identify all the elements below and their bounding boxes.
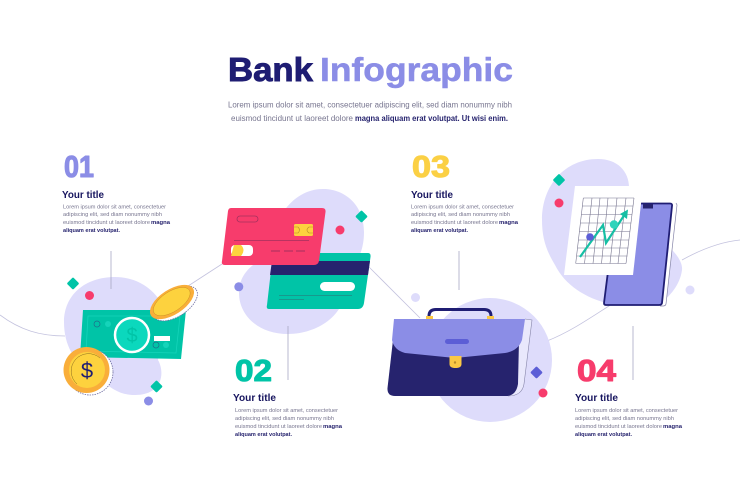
connecting line (0, 240, 740, 341)
panel: 03 text: Your title (411, 189, 453, 201)
icon: dollar coin: $ (81, 358, 93, 383)
flap (392, 319, 525, 358)
chart card (564, 186, 643, 275)
illustration: briefcase (387, 251, 552, 422)
illustration: credit cards (222, 189, 420, 380)
panel: 01 text: euismod tincidunt ut laoreet dolore (63, 220, 150, 226)
panel: 02 text: aliquam erat volutpat. (235, 432, 293, 438)
illustration: phone and chart (542, 159, 694, 380)
illustration: money (64, 251, 203, 406)
panel: 04 text: aliquam erat volutpat. (575, 432, 633, 438)
bag body (387, 340, 519, 396)
panel: 02 text: 02 (235, 353, 272, 388)
panel: 01 text: aliquam erat volutpat. (63, 228, 121, 234)
icon: tilted coin (144, 277, 203, 329)
red card (222, 208, 326, 265)
panel: 01 text (62, 149, 171, 234)
banknote: $ (126, 325, 138, 347)
panel: 03 text (411, 149, 519, 234)
panel: 03 text: euismod tincidunt ut laoreet dolore (411, 220, 498, 226)
handle (429, 310, 491, 318)
panel: 03 text: magna (499, 220, 519, 226)
title: Bank (228, 51, 314, 88)
panel: 04 text: Lorem ipsum dolor sit amet, consectetuer (575, 408, 678, 414)
clasp (450, 356, 462, 368)
title (228, 51, 513, 88)
panel: 01 text: Your title (62, 189, 104, 201)
icon: dollar coin (64, 347, 113, 395)
panel: 02 text (233, 353, 343, 438)
panel: 02 text: Your title (233, 392, 276, 404)
panel: 04 text (575, 353, 683, 438)
panel: 02 text: magna (323, 424, 343, 430)
subtitle: Lorem ipsum dolor sit amet, consectetuer adipiscing elit, sed diam nonummy nibh (228, 100, 512, 110)
subtitle: magna aliquam erat volutpat. Ut wisi enim. (355, 114, 508, 123)
title: Infographic (320, 51, 513, 88)
panel: 02 text: adipiscing elit, sed diam nonummy nibh (235, 416, 334, 422)
panel: 04 text: 04 (577, 353, 617, 388)
panel: 01 text: adipiscing elit, sed diam nonummy nibh (63, 212, 162, 218)
panel: 03 text: Lorem ipsum dolor sit amet, consectetuer (411, 204, 514, 210)
briefcase shadow outline (508, 319, 532, 396)
panel: 02 text: Lorem ipsum dolor sit amet, consectetuer (235, 408, 338, 414)
panel: 01 text: Lorem ipsum dolor sit amet, consectetuer (63, 204, 166, 210)
panel: 03 text: adipiscing elit, sed diam nonummy nibh (411, 212, 510, 218)
subtitle: euismod tincidunt ut laoreet dolore (231, 114, 354, 123)
green card (267, 253, 371, 309)
panel: 04 text: Your title (575, 392, 618, 404)
panel: 01 text: 01 (64, 149, 94, 184)
banknote (80, 310, 186, 359)
panel: 04 text: adipiscing elit, sed diam nonummy nibh (575, 416, 674, 422)
panel: 01 text: magna (151, 220, 171, 226)
phone (604, 203, 677, 306)
panel: 03 text: 03 (412, 149, 450, 184)
subtitle (228, 100, 512, 123)
panel: 04 text: euismod tincidunt ut laoreet dolore (575, 424, 662, 430)
panel: 04 text: magna (663, 424, 683, 430)
panel: 03 text: aliquam erat volutpat. (411, 228, 469, 234)
panel: 02 text: euismod tincidunt ut laoreet dolore (235, 424, 322, 430)
